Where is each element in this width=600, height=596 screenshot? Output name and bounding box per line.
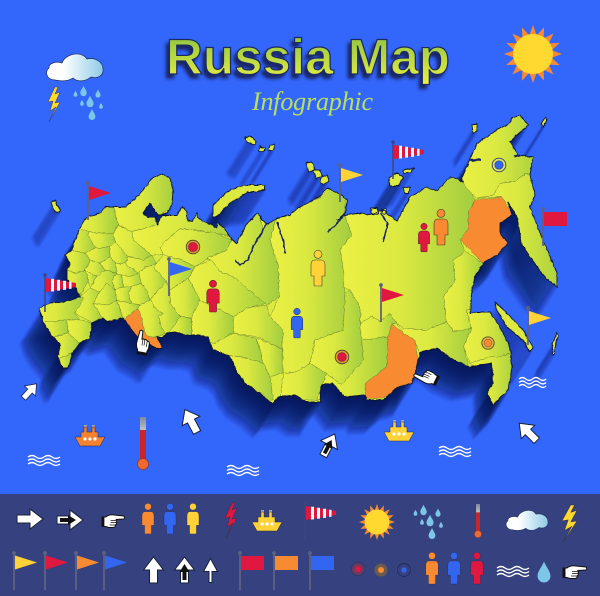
flag: red north bbox=[86, 181, 111, 220]
person: red east bbox=[418, 223, 430, 252]
icon: rain drops bbox=[74, 86, 103, 120]
row 2 person: orange bbox=[426, 552, 438, 584]
row 2 marker: orange bbox=[374, 564, 388, 576]
flag: windsock north bbox=[391, 140, 424, 179]
row 2 flag: blue bbox=[102, 551, 127, 590]
person: orange bbox=[434, 209, 448, 245]
flag: red rectangle bbox=[541, 207, 567, 246]
person: blue bbox=[291, 308, 303, 338]
eastern regions bbox=[270, 112, 567, 408]
marker: red south bbox=[335, 350, 349, 364]
arrow: se corner bbox=[513, 417, 543, 447]
thermometer bbox=[138, 417, 148, 470]
arrow: sw corner bbox=[18, 379, 42, 403]
hand cursor: caucasus bbox=[135, 330, 151, 355]
subtitle: Infographic bbox=[251, 87, 373, 116]
row 1 bolt: yellow bbox=[562, 505, 577, 542]
row 2 flag: orange rectangle bbox=[272, 551, 298, 590]
icon: cloud bbox=[47, 54, 103, 81]
ship: yellow bbox=[384, 420, 414, 441]
row 2 person: red bbox=[471, 552, 483, 584]
panel: icon legend bbox=[0, 494, 600, 596]
person: yellow bbox=[311, 250, 325, 286]
russia map bbox=[33, 112, 567, 408]
row 1 arrow: solid right bbox=[17, 509, 43, 529]
marker: blue bbox=[492, 158, 506, 172]
arrow: south bbox=[176, 405, 206, 437]
waves: south centre bbox=[227, 466, 259, 476]
hand cursor: far east bbox=[413, 366, 440, 387]
flag: blue bbox=[167, 257, 192, 296]
row 2 marker: red bbox=[352, 562, 364, 576]
row 2 arrow: thin up bbox=[204, 558, 218, 582]
row 1 sun bbox=[359, 504, 395, 540]
row 2 flag: orange bbox=[74, 551, 99, 590]
marker: red west bbox=[186, 240, 200, 254]
row 2 flag: red bbox=[43, 551, 68, 590]
row 1 hand bbox=[102, 515, 125, 528]
row 1 windsock bbox=[303, 501, 336, 540]
icon: lightning bbox=[48, 87, 60, 122]
row 1 person: orange bbox=[142, 503, 154, 534]
title: Russia Map bbox=[166, 29, 450, 85]
flag: yellow north bbox=[338, 163, 363, 202]
marker: orange bbox=[482, 337, 494, 349]
row 2 arrow: outlined up bbox=[174, 557, 194, 583]
row 2 hand bbox=[563, 566, 587, 578]
row 2 person: blue bbox=[448, 552, 460, 584]
ship: orange bbox=[75, 425, 105, 446]
row 2 flag: red rectangle bbox=[238, 551, 264, 590]
row 1 cloud bbox=[506, 510, 548, 530]
western regions bbox=[33, 171, 283, 400]
waves: east bbox=[519, 378, 546, 388]
waves: southeast bbox=[439, 446, 471, 456]
map coastline bbox=[39, 115, 558, 405]
row 2 arrow: solid up bbox=[144, 557, 164, 583]
row 2 flag: blue rectangle bbox=[308, 551, 334, 590]
row 1 thermometer bbox=[474, 504, 482, 538]
row 2 flag: yellow bbox=[12, 551, 37, 590]
row 1 arrow: outlined right bbox=[57, 510, 83, 530]
icon: sun bbox=[504, 25, 562, 83]
arrow: outlined bbox=[315, 430, 343, 460]
person: red west bbox=[207, 280, 219, 312]
flag: red siberia bbox=[379, 283, 404, 322]
flag: windsock west bbox=[43, 273, 76, 312]
row 2 drop bbox=[538, 562, 550, 582]
row 2 waves bbox=[497, 566, 529, 576]
flag: yellow east bbox=[526, 306, 551, 345]
row 1 person: blue bbox=[164, 503, 176, 534]
row 1 drops bbox=[414, 505, 443, 539]
row 1 bolt: red bbox=[225, 503, 237, 538]
row 1 ship bbox=[252, 510, 282, 531]
rivers and gulfs bbox=[235, 155, 520, 265]
row 1 person: yellow bbox=[187, 503, 199, 534]
waves: southwest bbox=[28, 456, 60, 466]
row 2 marker: blue bbox=[398, 564, 410, 576]
long map shadow bbox=[19, 116, 558, 440]
